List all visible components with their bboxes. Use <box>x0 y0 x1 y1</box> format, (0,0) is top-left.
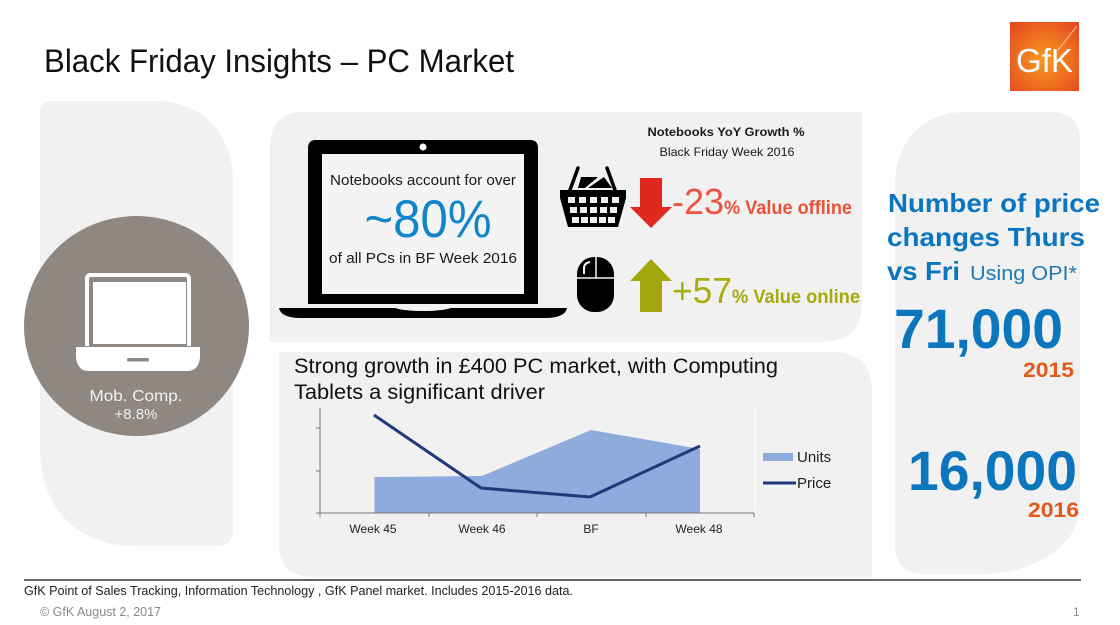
notebooks share lead-in: Notebooks account for over <box>330 173 516 189</box>
x axis labels: Week 46 <box>458 522 506 536</box>
title: Black Friday Insights – PC Market <box>44 43 514 79</box>
online growth value: % Value online <box>732 287 860 308</box>
chart heading: Tablets a significant driver <box>294 380 545 404</box>
source note: GfK Point of Sales Tracking, Information Technology , GfK Panel market. Includes 2015-2016 data. <box>24 584 573 598</box>
legend: Price <box>797 475 831 492</box>
price changes heading: Number of price <box>888 188 1100 218</box>
x axis labels: BF <box>583 522 599 536</box>
panel: mobile computing <box>24 101 249 546</box>
online growth value <box>672 270 860 311</box>
panel: £400 PC market <box>279 352 872 577</box>
offline growth value: % Value offline <box>724 198 852 219</box>
offline growth value: -23 <box>672 181 724 222</box>
mobile computing growth value: +8.8% <box>115 406 157 423</box>
offline growth value <box>672 181 852 222</box>
chart heading: Strong growth in £400 PC market, with Computing <box>294 354 778 378</box>
YoY growth subheading: Black Friday Week 2016 <box>660 145 795 159</box>
2016 price changes value: 16,000 <box>908 439 1077 502</box>
notebooks share value: ~80% <box>364 190 492 249</box>
price changes heading: Using OPI* <box>970 263 1077 285</box>
mobile computing circle <box>24 216 249 436</box>
icon: computer mouse <box>577 257 614 312</box>
panel: notebooks <box>270 112 862 342</box>
legend: Units <box>797 449 831 466</box>
icon: shopping basket <box>560 168 626 227</box>
price changes heading: vs Fri <box>887 256 960 286</box>
price changes heading <box>887 188 1100 286</box>
x axis labels: Week 45 <box>349 522 397 536</box>
x axis labels: Week 48 <box>675 522 723 536</box>
price changes heading: changes Thurs <box>887 222 1085 252</box>
mobile computing label: Mob. Comp. <box>90 388 182 405</box>
YoY growth heading: Notebooks YoY Growth % <box>648 125 805 139</box>
area and line chart <box>316 408 831 536</box>
2015 price changes value: 71,000 <box>894 297 1063 360</box>
legend <box>763 449 831 492</box>
arrow: value down <box>630 178 672 228</box>
logo: GfK: GfK <box>1016 42 1073 79</box>
icon: notebook with share callout <box>279 140 567 318</box>
panel: price changes <box>887 112 1100 574</box>
page number: 1 <box>1073 605 1080 619</box>
icon: white laptop <box>76 275 200 371</box>
2016 label: 2016 <box>1028 499 1079 522</box>
notebooks share caption: of all PCs in BF Week 2016 <box>329 251 517 267</box>
x axis labels <box>349 522 723 536</box>
copyright: © GfK August 2, 2017 <box>40 605 161 619</box>
area: units <box>374 430 700 513</box>
line: price <box>374 415 700 497</box>
chart heading <box>294 354 778 404</box>
logo: GfK <box>1010 22 1079 91</box>
axes <box>316 408 754 517</box>
online growth value: +57 <box>672 270 732 311</box>
2015 label: 2015 <box>1023 359 1074 382</box>
arrow: value up <box>630 259 672 312</box>
